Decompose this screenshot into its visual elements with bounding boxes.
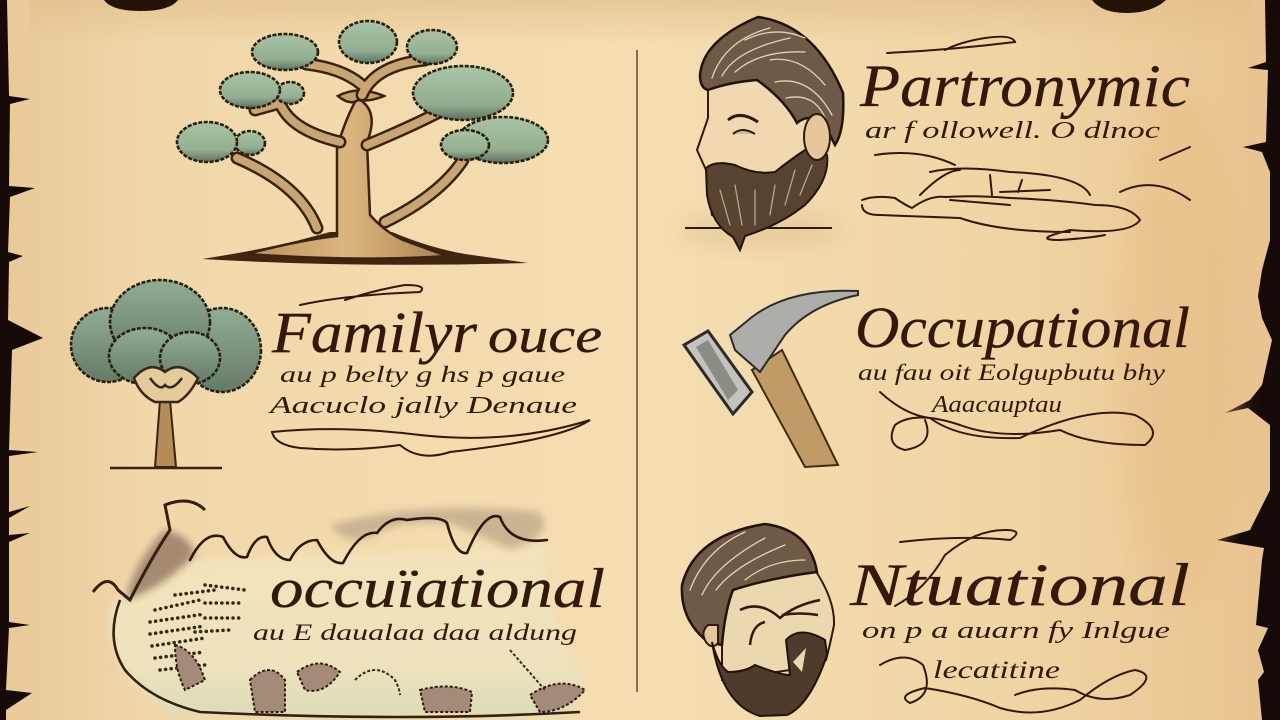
icon: hammer [684, 291, 858, 467]
panel: map illustration [93, 501, 585, 717]
label: National: on p a auarn fy Inlgue [862, 618, 1170, 644]
label: Patronymic: ar f ollowell. O dlnoc [865, 118, 1160, 144]
label: Occupational [855, 295, 1190, 450]
label: Family [267, 285, 602, 456]
label: occupational map: occuïational [270, 558, 605, 620]
top corner ornaments [104, 0, 1166, 13]
label: Patronymic: Partronymic [859, 53, 1190, 119]
icon: frowning bearded man [682, 524, 834, 716]
label: Occupational: au fau oit Eolgupbutu bhy [858, 360, 1166, 385]
label: National [849, 530, 1190, 712]
label: Family: ouce [488, 307, 602, 363]
label: occupational map: au E daualaa daa aldung [253, 620, 577, 645]
label: Patronymic [859, 37, 1190, 240]
label: Family: Familyr [271, 300, 477, 365]
label: Family: Aacuclo jally Denaue [267, 393, 577, 419]
icon: large family tree [177, 21, 548, 265]
centre divider [636, 50, 638, 692]
label: Occupational: Aaacauptau [930, 392, 1062, 418]
label: National: Ntuational [849, 552, 1190, 618]
icon: bearded man profile [685, 17, 843, 250]
label: occupational map [253, 558, 605, 645]
label: Occupational: Occupational [855, 295, 1190, 360]
label: National: lecatitine [933, 657, 1060, 684]
icon: small tree [71, 280, 261, 468]
label: Family: au p belty g hs p gaue [280, 362, 565, 387]
